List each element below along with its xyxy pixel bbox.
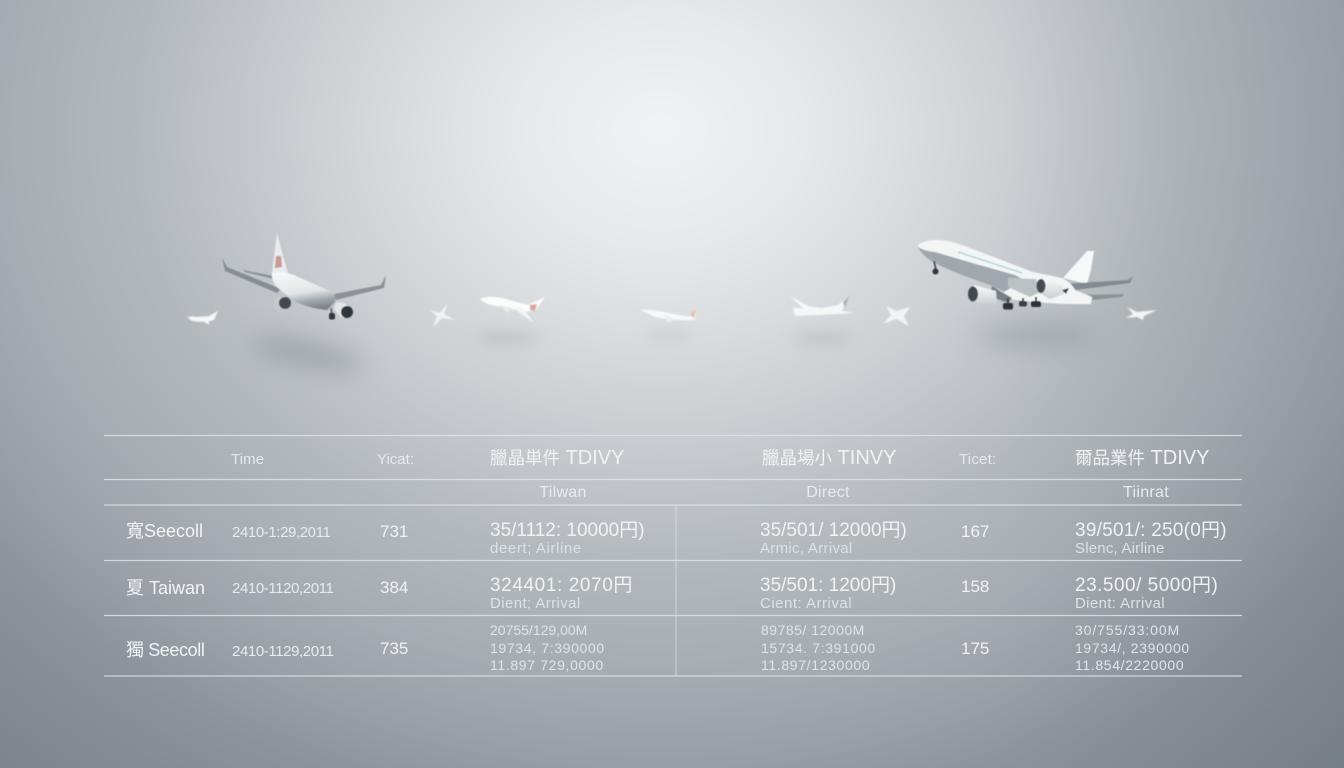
plane shadows	[249, 326, 1097, 376]
table row 3: 735	[380, 639, 408, 658]
table row 3: 175	[961, 639, 989, 658]
table subheader row: Direct	[806, 484, 850, 501]
table row 2: 夏 Taiwan	[126, 578, 205, 598]
table row 1: 35/1112: 10000円)	[490, 520, 645, 541]
icon: small airplane far right	[1126, 307, 1157, 320]
table row 3: 11.897 729,0000	[490, 657, 604, 673]
icon: small airplane top view right	[883, 306, 910, 326]
table row 1: 731	[380, 522, 408, 541]
icon: small airplane far left	[187, 311, 218, 325]
table row 2: 384	[380, 578, 408, 597]
table row 2: 35/501: 1200円)	[760, 575, 896, 596]
table row 3: 11.897/1230000	[761, 657, 870, 673]
table row 1: 39/501/: 250(0円)	[1075, 520, 1227, 541]
icon: medium airplane left centre	[480, 297, 545, 323]
table row 3	[126, 622, 1190, 673]
icon: medium airplane right centre	[790, 296, 855, 316]
table row 1: 寬Seecoll	[126, 521, 203, 541]
table subheader row	[539, 484, 1169, 501]
table header row: Yicat:	[377, 451, 414, 468]
icon: large airplane right	[918, 240, 1133, 310]
table row 3: 11.854/2220000	[1075, 657, 1184, 673]
table row 2: 324401: 2070円	[490, 575, 633, 596]
icon: large airplane left	[222, 233, 386, 320]
table row 1: 167	[961, 522, 989, 541]
table header row	[231, 447, 1209, 469]
table row 2	[126, 575, 1218, 612]
table	[104, 436, 1242, 676]
table header row: 臘晶単件 TDIVY	[490, 447, 624, 469]
table row 2: 23.500/ 5000円)	[1075, 575, 1218, 596]
table row 3: 19734, 7:390000	[490, 640, 605, 656]
table row 3: 15734. 7:391000	[761, 640, 876, 656]
table row 1: Slenc, Airline	[1075, 540, 1165, 557]
table row 3: 30/755/33:00M	[1075, 622, 1180, 638]
table header row: 爾品業件 TDIVY	[1075, 447, 1209, 469]
table subheader row: Tiinrat	[1123, 484, 1169, 501]
table row 1	[126, 520, 1227, 557]
table row 3: 19734/, 2390000	[1075, 640, 1190, 656]
icon: small airplane top view left	[430, 303, 455, 327]
table subheader row: Tilwan	[539, 484, 587, 501]
table row 1: 2410-1:29,2011	[232, 524, 330, 541]
table header row: Time	[231, 451, 264, 468]
table row 2: Dient; Arrival	[490, 595, 581, 612]
table row 2: Cient: Arrival	[760, 595, 852, 612]
icon: medium airplane centre	[641, 309, 696, 323]
table row 3: 獨 Seecoll	[126, 640, 204, 660]
table row 1: 35/501/ 12000円)	[760, 520, 907, 541]
table row 2: 2410-1120,2011	[232, 580, 334, 597]
table row 2: 158	[961, 577, 989, 596]
table row 3: 20755/129,00M	[490, 622, 587, 638]
table row 1: Armic, Arrival	[760, 540, 853, 557]
table header row: Ticet:	[959, 451, 996, 468]
table row 3: 2410-1129,2011	[232, 643, 334, 660]
table header row: 臘晶場小 TINVY	[762, 447, 896, 469]
table row 2: Dient: Arrival	[1075, 595, 1165, 612]
table row 3: 89785/ 12000M	[761, 622, 865, 638]
table row 1: deert; Airline	[490, 540, 582, 557]
